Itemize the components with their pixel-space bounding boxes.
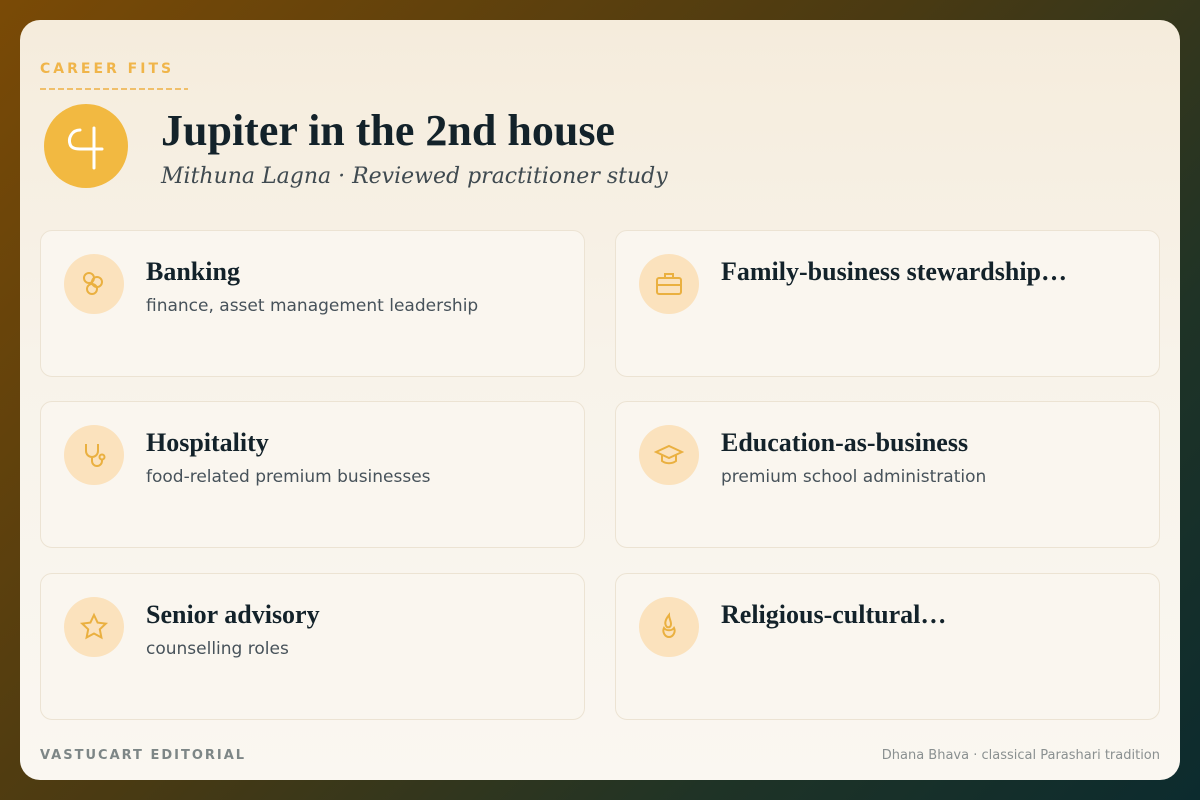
card: education: premium school administration	[721, 467, 986, 487]
card: education	[615, 401, 1160, 548]
card: banking	[40, 230, 585, 377]
card: religious cultural	[615, 573, 1160, 720]
subtitle: Mithuna Lagna · Reviewed practitioner study	[161, 164, 668, 189]
card: education: Education-as-business	[721, 428, 968, 457]
card: family business	[615, 230, 1160, 377]
footer brand: VASTUCART EDITORIAL	[40, 748, 246, 763]
icon: grad cap	[639, 425, 699, 485]
card: senior advisory: counselling roles	[146, 639, 289, 659]
card: senior advisory	[40, 573, 585, 720]
icon: stethoscope	[64, 425, 124, 485]
icon: briefcase	[639, 254, 699, 314]
card: family business: Family-business stewardship…	[721, 257, 1067, 286]
card: hospitality	[40, 401, 585, 548]
title: Jupiter in the 2nd house	[161, 106, 615, 155]
card: banking: Banking	[146, 257, 240, 286]
icon: flame	[639, 597, 699, 657]
card: banking: finance, asset management leadership	[146, 296, 478, 316]
card: religious cultural: Religious-cultural…	[721, 600, 946, 629]
card: hospitality: food-related premium businesses	[146, 467, 431, 487]
icon: jupiter badge	[44, 104, 128, 188]
card: hospitality: Hospitality	[146, 428, 269, 457]
kicker: career fits: CAREER FITS	[40, 61, 174, 77]
icon: coins	[64, 254, 124, 314]
card: senior advisory: Senior advisory	[146, 600, 320, 629]
footer source: Dhana Bhava · classical Parashari tradition	[882, 748, 1160, 763]
icon: star	[64, 597, 124, 657]
